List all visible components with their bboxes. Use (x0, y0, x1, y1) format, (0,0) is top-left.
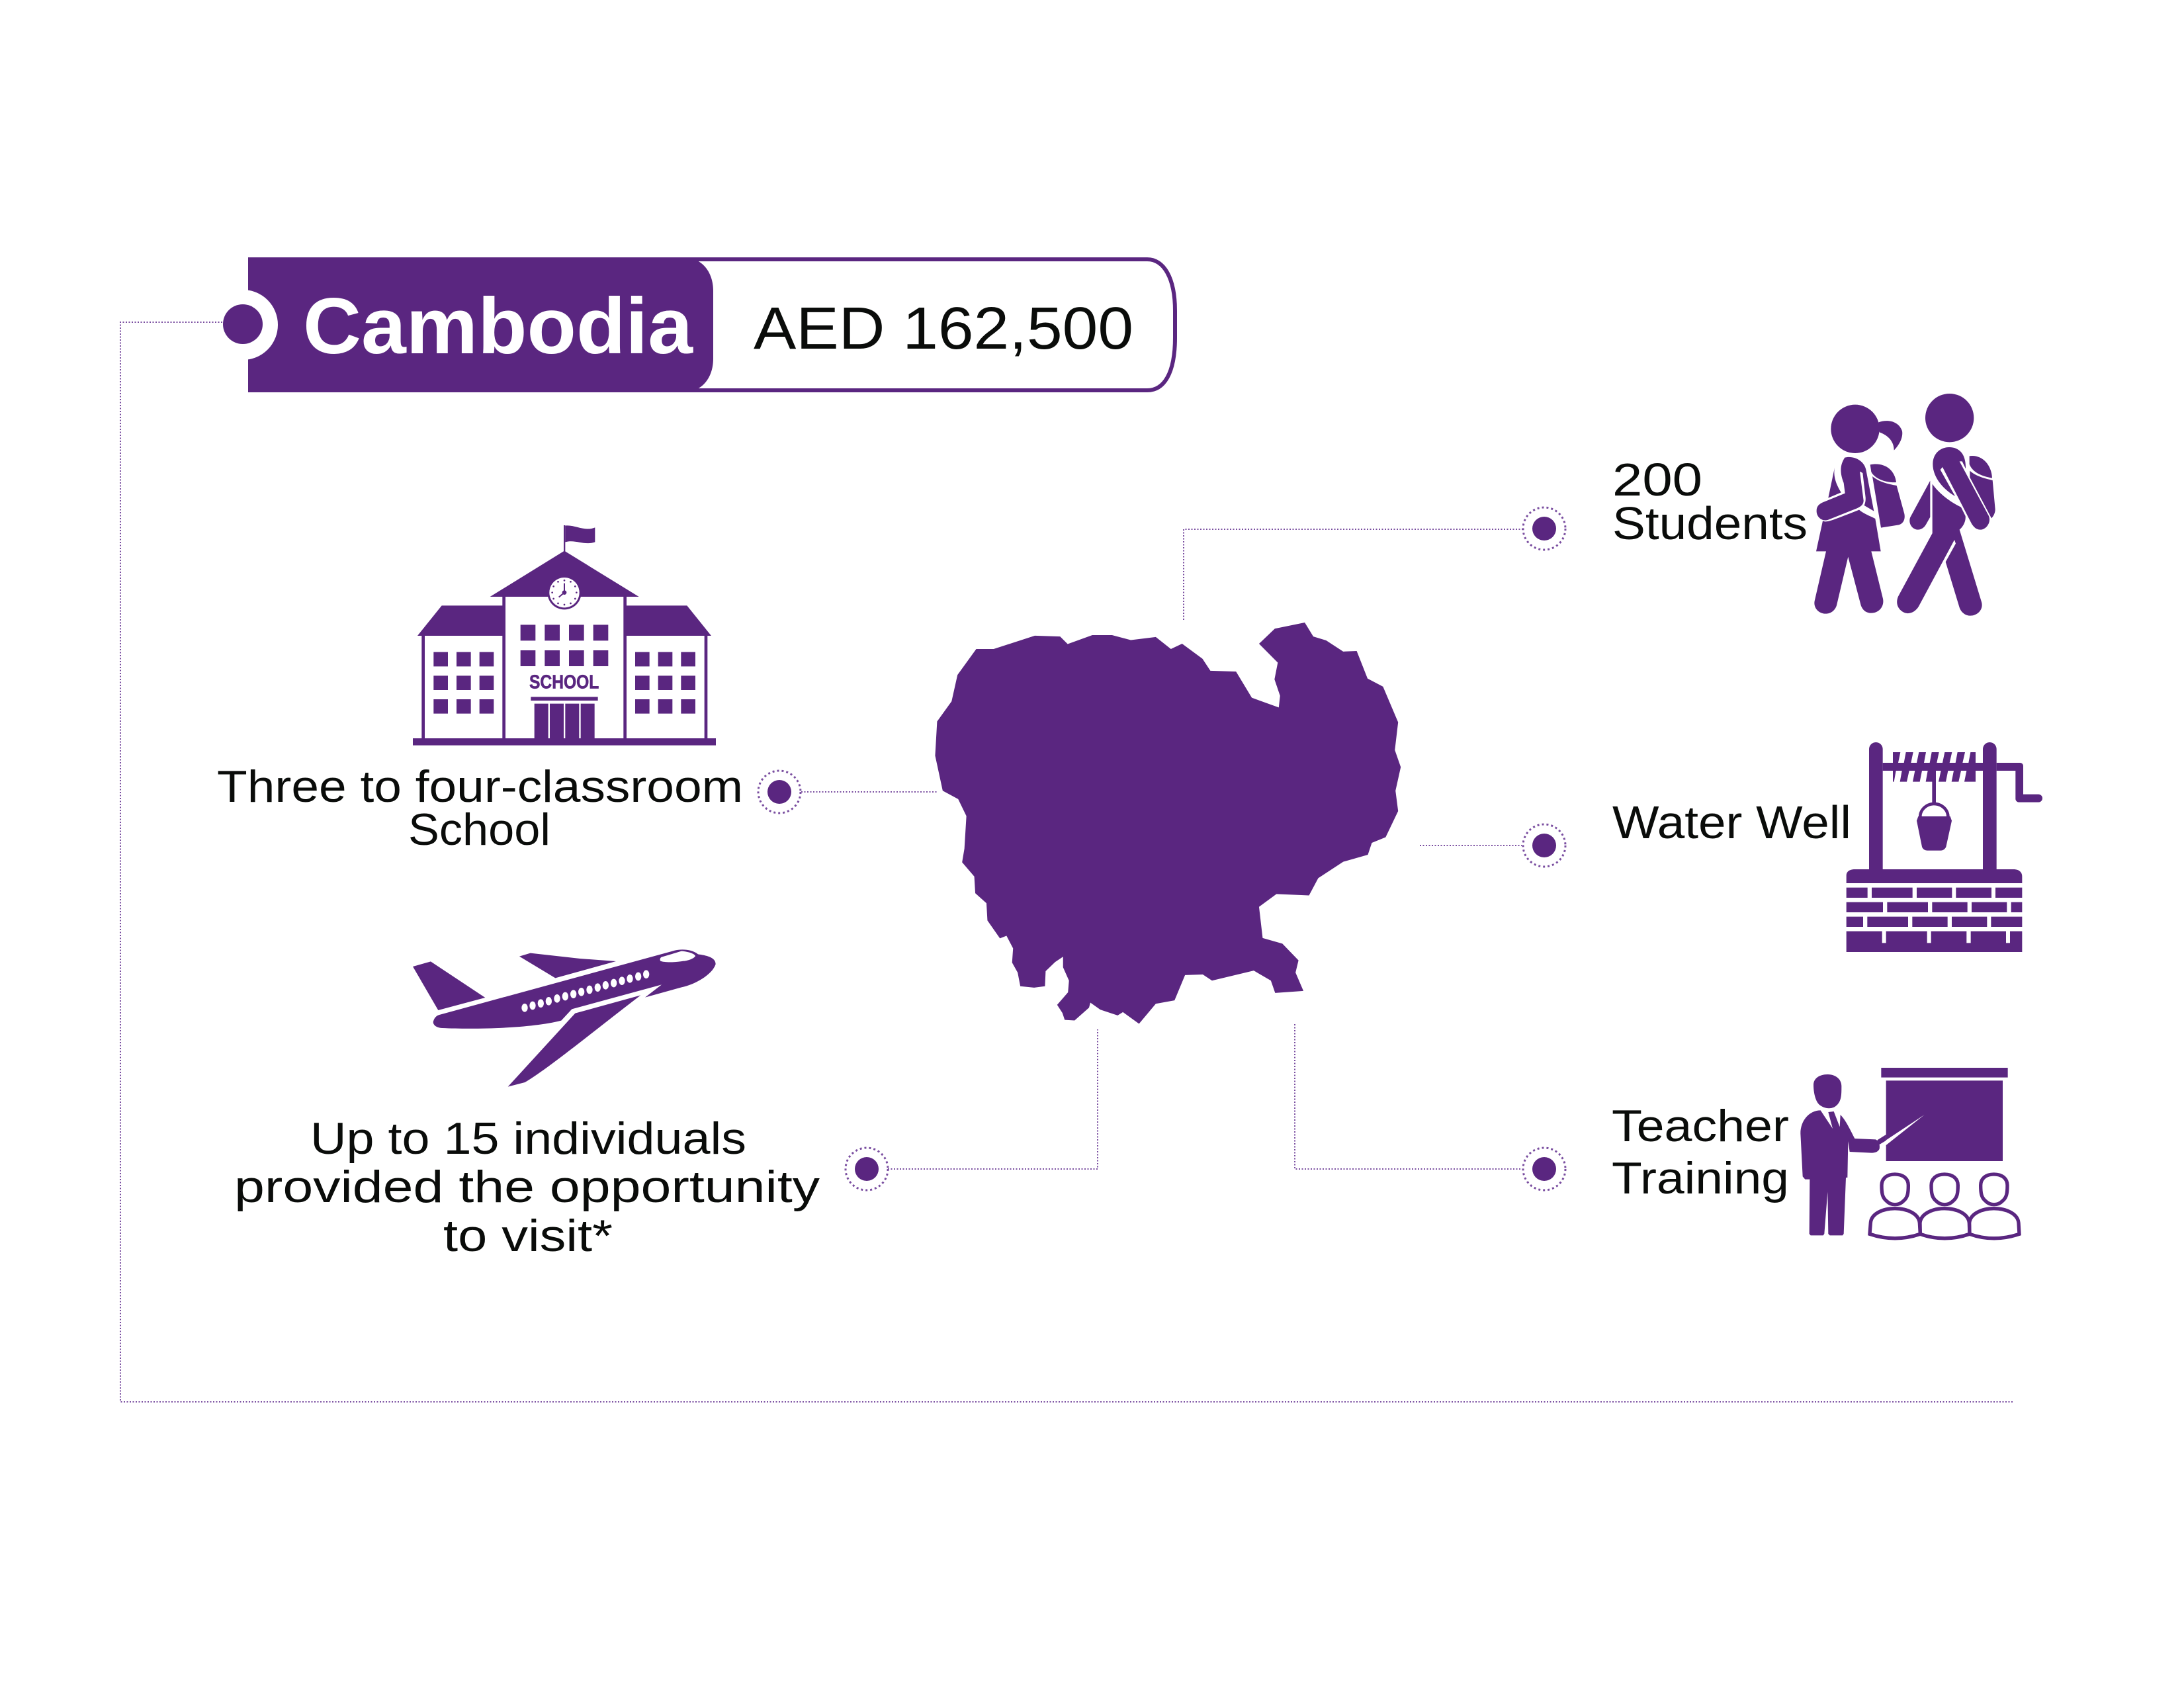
funding amount: AED 162,500 (754, 296, 1133, 362)
header node (208, 290, 278, 360)
amount pill outline (662, 259, 1175, 390)
water well label: Water Well (1612, 797, 1851, 848)
students connector (1184, 529, 1522, 620)
school connector (801, 791, 937, 793)
school label: School (408, 804, 550, 855)
icon: school building: SCHOOL (529, 672, 599, 693)
training node (1523, 1148, 1565, 1190)
country name: Cambodia (303, 282, 693, 370)
map: Cambodia (935, 623, 1401, 1024)
icon: teacher with students (1800, 1068, 2019, 1238)
training connector (1295, 1024, 1522, 1169)
school label: Three to four-classroom (217, 761, 743, 812)
teacher training label (1612, 1101, 1789, 1203)
students node (1523, 507, 1565, 550)
visit label: provided the opportunity (234, 1162, 820, 1212)
students label: 200 (1612, 454, 1702, 505)
visit label: to visit* (443, 1211, 613, 1261)
icon: students (1814, 394, 1995, 616)
water connector (1420, 845, 1522, 846)
visit node (846, 1148, 888, 1190)
school label (217, 761, 743, 855)
country label block (248, 257, 713, 392)
teacher training label: Teacher (1612, 1101, 1789, 1151)
visit connector (888, 1029, 1098, 1169)
icon: school building (413, 525, 716, 746)
teacher training label: Training (1612, 1153, 1789, 1203)
water node (1523, 824, 1565, 867)
school node (758, 771, 801, 813)
students label (1612, 454, 1808, 549)
visit label (234, 1113, 820, 1261)
students label: Students (1612, 497, 1808, 549)
visit label: Up to 15 individuals (310, 1113, 746, 1164)
icon: airplane (413, 949, 716, 1087)
icon: water well (1847, 742, 2042, 952)
outer frame connector (120, 322, 2013, 1402)
header banner (208, 257, 1175, 392)
